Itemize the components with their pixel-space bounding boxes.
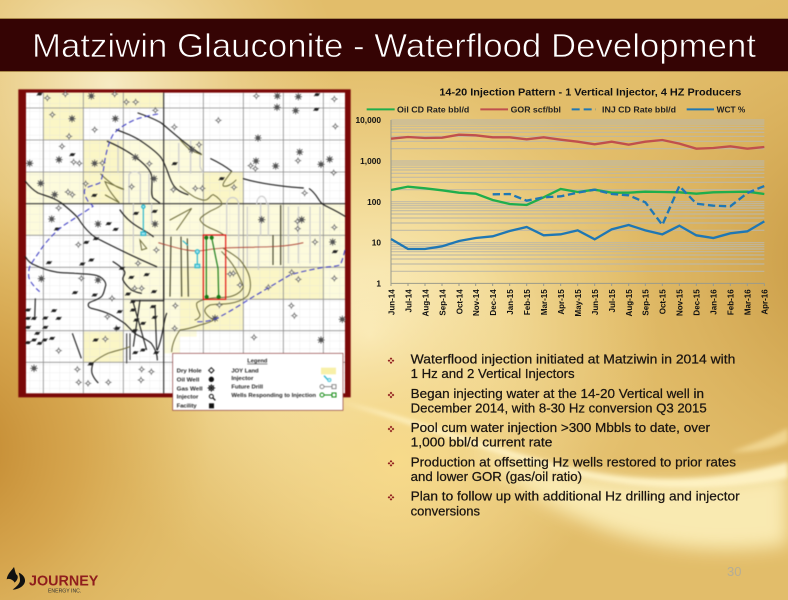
responding wells green: [205, 236, 220, 298]
map base: [25, 91, 346, 393]
title band: [0, 18, 788, 72]
map legend: Future Drill: [231, 384, 264, 390]
bullet: plan: Plan to follow up with additional Hz drilling and injector: [411, 490, 740, 504]
x axis labels: Jun-15: [591, 289, 600, 315]
axes: [391, 120, 764, 286]
olive contours: [92, 140, 250, 363]
injectors cyan: [141, 205, 200, 268]
x axis labels: Jan-16: [710, 289, 719, 315]
series: GOR: [391, 135, 764, 149]
chart legend: INJ CD Rate bbl/d: [602, 104, 676, 114]
x axis labels: Jun-14: [387, 289, 396, 315]
title: Matziwin Glauconite - Waterflood Development: [32, 27, 756, 64]
x axis labels: Apr-16: [761, 289, 770, 315]
structure contours: [25, 113, 345, 383]
map frame: [18, 89, 351, 397]
chart title: 14-20 Injection Pattern - 1 Vertical Injector, 4 HZ Producers: [439, 88, 742, 99]
bullet: plan: [388, 490, 740, 518]
bullet: plan: conversions: [411, 504, 480, 518]
series: WCT: [391, 221, 764, 249]
x axis labels: Feb-16: [727, 289, 736, 315]
y axis labels: 10,000: [356, 115, 381, 125]
bullet: began injecting: [388, 387, 707, 416]
y axis labels: 1,000: [360, 156, 381, 166]
page number: 30: [727, 564, 741, 579]
lease boundary dashed: [29, 114, 345, 322]
x axis labels: Aug-15: [625, 289, 634, 316]
x axis labels: Oct-15: [659, 289, 668, 314]
x axis labels: Jul-14: [404, 289, 413, 312]
x axis labels: Nov-15: [676, 289, 685, 316]
x axis labels: May-15: [574, 289, 583, 316]
bullet: pool cum: 1,000 bbl/d current rate: [411, 436, 552, 450]
bullet: pool cum: [388, 421, 710, 450]
bullet: production: [388, 455, 736, 484]
red pipeline: [158, 243, 303, 251]
bullet: began injecting: December 2014, with 8-30 Hz conversion Q3 2015: [411, 402, 707, 416]
highlight pattern box: [203, 235, 226, 299]
x axis labels: Dec-14: [489, 289, 498, 316]
map legend: Wells Responding to Injection: [231, 393, 316, 399]
JOY land parcels: [26, 140, 345, 353]
producer sticks: [35, 205, 281, 363]
chart legend: [367, 104, 746, 114]
bullet: pool cum: Pool cum water injection >300 Mbbls to date, over: [411, 421, 710, 435]
x axis labels: [387, 289, 770, 316]
chart: injection pattern time series: [356, 88, 770, 316]
series: injection rate: [493, 186, 764, 225]
minor gridlines: [391, 120, 764, 271]
future drill wells: [118, 140, 320, 270]
x axis labels: Sep-15: [642, 289, 651, 316]
chart legend: WCT %: [717, 104, 746, 114]
map legend: Gas Well: [177, 386, 203, 392]
bullet: production: Production at offsetting Hz wells restored to prior rates: [411, 455, 736, 469]
bullet list: [388, 353, 740, 518]
panel: well map: [18, 88, 352, 412]
y axis labels: 1: [376, 278, 381, 288]
x axis labels: Mar-15: [540, 289, 549, 315]
map legend: Oil Well: [177, 377, 200, 383]
section grid: [26, 93, 345, 393]
x axis labels: Apr-15: [557, 289, 566, 315]
logo tagline: ENERGY INC.: [48, 589, 81, 595]
map legend: Injector: [177, 395, 198, 401]
map legend: Facility: [177, 403, 197, 409]
bullet: initiated: [388, 353, 735, 381]
logo wordmark: JOURNEY: [29, 573, 98, 590]
chart legend: GOR scf/bbl: [511, 104, 561, 114]
y axis labels: 10: [372, 238, 381, 248]
map legend: Legend: [247, 359, 268, 365]
wells: [25, 91, 346, 387]
map legend: [173, 353, 343, 410]
x axis labels: Nov-14: [472, 289, 481, 316]
map legend: JOY Land: [231, 369, 259, 375]
x axis labels: Aug-14: [421, 289, 430, 316]
x axis labels: Jul-15: [608, 289, 617, 312]
series: oil rate: [391, 187, 764, 205]
bullet: began injecting: Began injecting water at the 14-20 Vertical well in: [411, 387, 704, 401]
x axis labels: Feb-15: [523, 289, 532, 315]
chart legend: Oil CD Rate bbl/d: [397, 104, 469, 114]
bullet: initiated: 1 Hz and 2 Vertical Injectors: [411, 367, 575, 381]
x axis labels: Oct-14: [455, 289, 464, 314]
x axis labels: Mar-16: [744, 289, 753, 315]
y axis labels: [356, 115, 381, 288]
x axis labels: Jan-15: [506, 289, 515, 315]
logo: Journey Energy: [6, 567, 98, 595]
logo mark: [7, 567, 25, 590]
x axis labels: Sep-14: [438, 289, 447, 316]
y axis labels: 100: [367, 197, 381, 207]
bullet: initiated: Waterflood injection initiated at Matziwin in 2014 with: [411, 353, 735, 367]
map legend: Dry Hole: [177, 369, 202, 375]
map legend: Injector: [231, 376, 253, 382]
bullet: production: and lower GOR (gas/oil ratio): [411, 470, 582, 484]
x axis labels: Dec-15: [693, 289, 702, 316]
